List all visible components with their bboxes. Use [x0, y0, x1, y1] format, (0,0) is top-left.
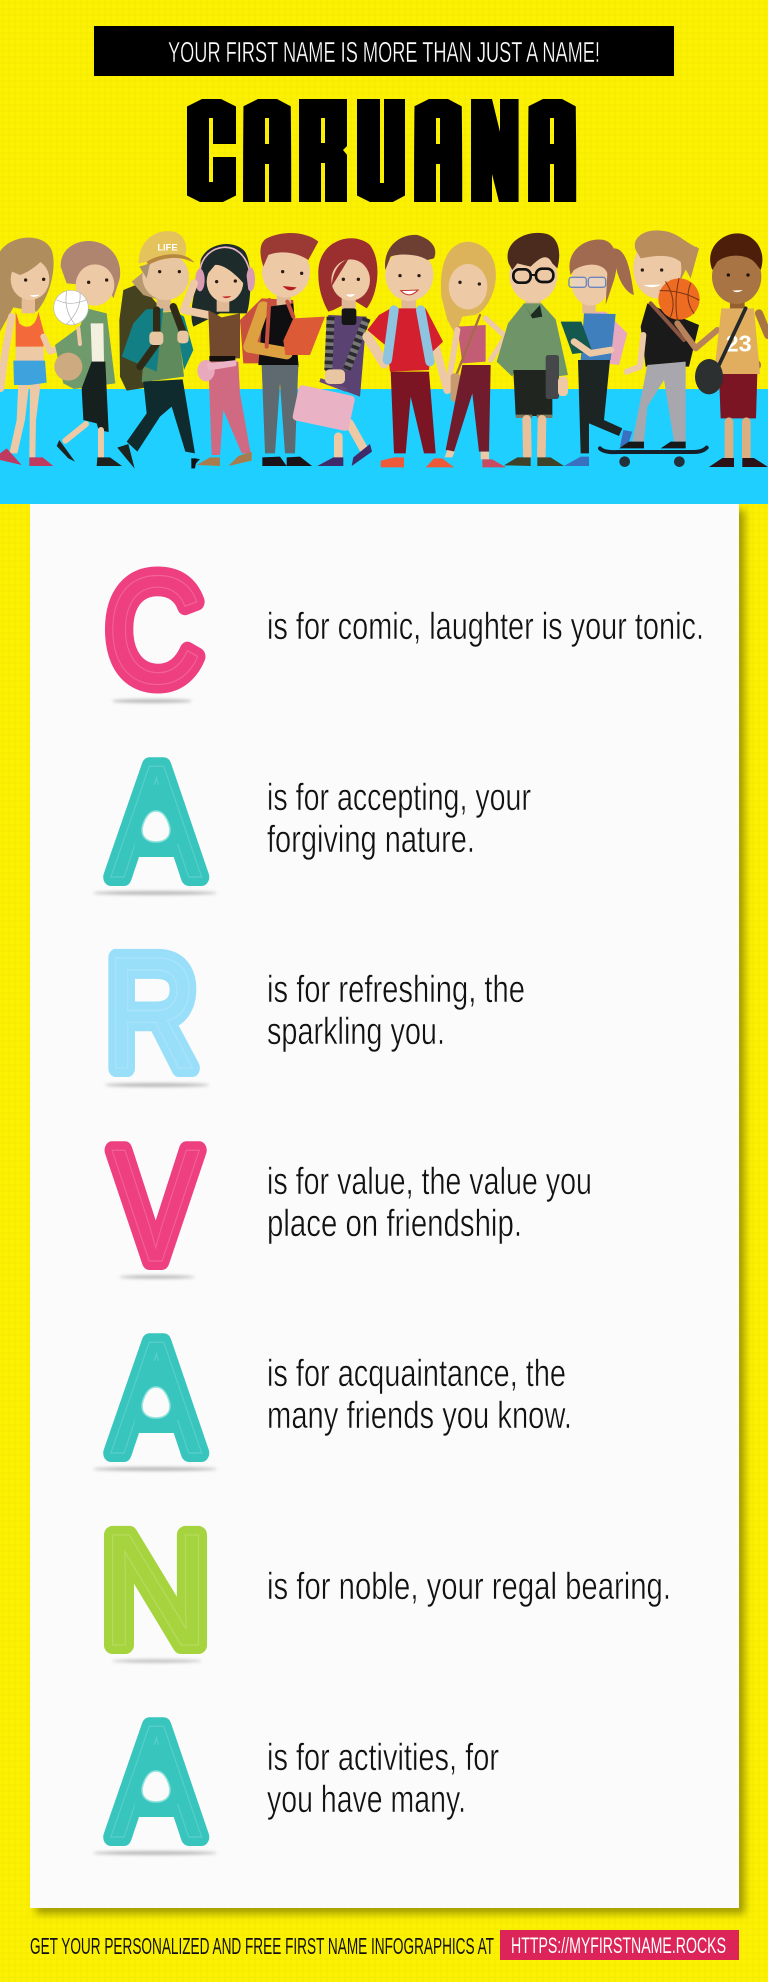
top banner — [94, 26, 674, 76]
letter A2: A — [111, 1308, 202, 1487]
text A3 — [267, 1737, 499, 1821]
letter A counter — [132, 785, 180, 857]
row: A (second) — [93, 1308, 572, 1487]
letter A3 counter — [132, 1745, 180, 1817]
text A2: many friends you know. — [267, 1395, 572, 1437]
letter A3: A — [111, 1692, 202, 1871]
cyan floor band — [0, 389, 768, 504]
letter N: N — [100, 1501, 211, 1680]
person: girl with red hair and pink bag — [292, 238, 377, 466]
text A3: is for activities, for — [267, 1737, 499, 1779]
person: curly-haired boy with tank top — [695, 233, 768, 467]
letter A: A — [111, 732, 202, 911]
person: boy on skateboard with basketball — [600, 230, 717, 467]
person: boy with red shirt — [367, 235, 454, 467]
letter C: C — [106, 543, 203, 716]
person: blonde girl — [441, 242, 506, 467]
row: A (third) — [93, 1692, 499, 1871]
row: A — [93, 732, 531, 911]
text R: sparkling you. — [267, 1011, 445, 1053]
letter A: A — [111, 732, 202, 911]
person: boy reading a red book — [240, 233, 325, 466]
letter shadow A3 — [93, 1851, 217, 1855]
letter shadow A2 — [93, 1467, 217, 1471]
text A: forgiving nature. — [267, 819, 475, 861]
illustration: group of people, right half — [367, 230, 768, 467]
row: N — [100, 1501, 671, 1680]
text A — [267, 777, 531, 861]
title: name: CARUANA — [209, 94, 554, 211]
letter R: R — [105, 923, 199, 1102]
row: C — [106, 543, 704, 716]
person: boy with glasses and green sweater — [497, 233, 568, 466]
letter V: V — [111, 1116, 200, 1296]
text V: place on friendship. — [267, 1203, 522, 1245]
letter V: V — [111, 1116, 200, 1296]
white content panel — [30, 504, 739, 1908]
text A2: is for acquaintance, the — [267, 1353, 566, 1395]
row: R — [105, 923, 525, 1102]
letter shadow V — [119, 1275, 195, 1279]
letter A2: A — [111, 1308, 202, 1487]
letter shadow N — [112, 1659, 202, 1663]
row: V — [111, 1116, 592, 1296]
letter shadow R — [105, 1083, 209, 1087]
text A3: you have many. — [267, 1779, 466, 1821]
letter A2 counter — [132, 1361, 180, 1433]
text R — [267, 969, 525, 1053]
person: hiker with cap and backpack — [117, 231, 200, 469]
person: girl with orange top — [0, 238, 77, 466]
letter shadow C — [112, 699, 192, 703]
person: hiker with cap and backpack: LIFE — [157, 243, 178, 253]
letter C: C — [106, 543, 203, 716]
person: girl with headphones and pink pants — [184, 244, 255, 468]
person: girl with green jacket and volleyball — [54, 241, 122, 466]
letter A3: A — [111, 1692, 202, 1871]
text A: is for accepting, your — [267, 777, 531, 819]
text R: is for refreshing, the — [267, 969, 525, 1011]
person: curly-haired boy with tank top: 23 — [726, 331, 752, 357]
person: girl with ponytail and pink backpack — [561, 239, 634, 466]
text V — [267, 1161, 592, 1245]
illustration: group of people, left half — [0, 231, 377, 469]
letter R: R — [105, 923, 199, 1102]
text A2 — [267, 1353, 572, 1437]
letter shadow A — [93, 891, 217, 895]
text V: is for value, the value you — [267, 1161, 592, 1203]
letter N: N — [100, 1501, 211, 1680]
